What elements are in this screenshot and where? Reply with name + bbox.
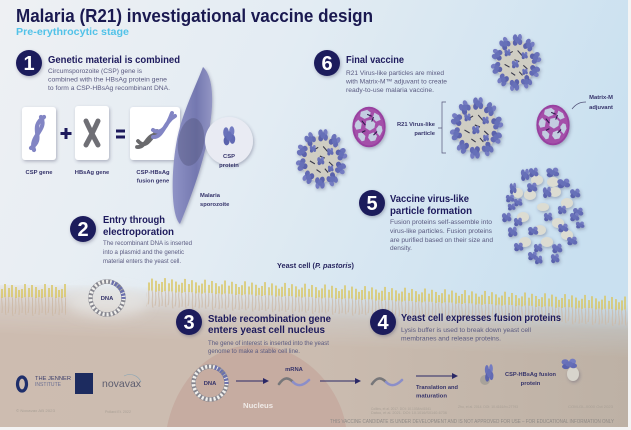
footer credits: Datoo, et al. 2021. DOI: 10.1016/S0140-6736 — [371, 411, 447, 415]
CSP protein callout: protein — [219, 163, 239, 169]
fusion protein label — [505, 372, 556, 387]
Matrix-M label with leader: adjuvant — [589, 105, 613, 111]
step 6 text: with Matrix-M™ adjuvant to create — [345, 78, 447, 86]
footer credits: © Novavax AB 2023 — [16, 409, 55, 413]
plasmid DNA entering cell — [90, 282, 124, 314]
soil: yeast cell interior — [0, 285, 628, 427]
subtitle: Pre-erythrocytic stage — [16, 26, 129, 38]
step 2 heading: Entry through — [103, 214, 165, 226]
step 5 heading — [390, 193, 472, 217]
Matrix-M label with leader: Matrix-M — [589, 95, 613, 101]
step 4 number: 4 — [377, 312, 389, 334]
arrow: translation and maturation: maturation — [416, 394, 447, 400]
card: fusion gene — [130, 107, 180, 184]
adjuvant: right — [537, 106, 569, 144]
step 2 number: 2 — [77, 219, 89, 241]
arrow: DNA to mRNA — [236, 378, 269, 384]
card: fusion gene: fusion gene — [137, 178, 170, 184]
logo: Jenner Institute: INSTITUTE — [35, 382, 61, 388]
step 1 heading: Genetic material is combined — [48, 54, 180, 66]
step 5 number: 5 — [366, 193, 378, 215]
malaria sporozoite: sporozoite — [200, 202, 230, 208]
title: Malaria (R21) investigational vaccine design — [16, 5, 373, 26]
step 6 text: R21 Virus-like particles are mixed — [346, 70, 444, 77]
plasmid DNA entering cell: DNA — [101, 296, 114, 302]
footer credits — [16, 405, 613, 415]
assembling virus-like particle — [502, 168, 584, 264]
step 2: electroporation — [70, 214, 192, 265]
fusion protein label: protein — [521, 381, 541, 387]
footer credits: Zhu, et al. 2014. DOI: 10.4161/hv.27793 — [458, 405, 518, 409]
step 6 number: 6 — [321, 53, 333, 75]
plasmid DNA in nucleus: DNA — [204, 381, 217, 387]
nucleus: Nucleus — [243, 401, 273, 410]
step 4 text: membranes and release proteins. — [401, 336, 501, 342]
yeast cell membrane — [0, 272, 628, 334]
plasmid DNA in nucleus — [194, 366, 227, 400]
step 4 number — [370, 309, 396, 335]
step 3 text: genome to make a stable cell line. — [208, 348, 300, 355]
step 6 heading: Final vaccine — [346, 54, 404, 66]
step 4 heading: Yeast cell expresses fusion proteins — [401, 312, 561, 324]
step 1: genetic material — [16, 50, 180, 184]
step 1 text — [48, 68, 170, 92]
step 3 heading: enters yeast cell nucleus — [208, 324, 325, 336]
step 6 text: ready-to-use malaria vaccine. — [346, 87, 434, 94]
card: fusion gene: CSP-HBsAg — [136, 170, 170, 176]
virus-like particle: top — [490, 33, 542, 92]
logo: Jenner Institute: THE JENNER — [35, 376, 71, 382]
step 1 text: to form a CSP-HBsAg recombinant DNA. — [48, 85, 170, 92]
step 5 text: virus-like particles. Fusion proteins — [390, 228, 493, 235]
malaria sporozoite: Malaria — [200, 193, 221, 199]
step 1 text: Circumsporozoite (CSP) gene is — [48, 68, 143, 75]
card: HBsAg gene — [75, 106, 110, 176]
step 2 text: into a plasmid and the genetic — [103, 249, 185, 256]
footer credits: COM-GL-0000 Oct 2023 — [568, 405, 613, 409]
step 3 number: 3 — [183, 312, 195, 334]
logo: Novavax: novavax — [102, 378, 142, 390]
step 1 number — [16, 50, 42, 76]
step 3 heading: Stable recombination gene — [208, 313, 331, 325]
mRNA — [279, 367, 309, 385]
protein fragment — [480, 364, 493, 385]
R21 particle label with bracket — [397, 102, 446, 153]
step 5 heading: Vaccine virus-like — [390, 193, 469, 205]
virus-like particle: centre — [449, 97, 504, 159]
step 5 text: Fusion proteins self-assemble into — [390, 219, 492, 226]
step 3 text: The gene of interest is inserted into the yeast — [208, 340, 329, 347]
step 3 heading — [208, 313, 331, 336]
equals sign — [116, 131, 125, 137]
R21 particle label with bracket: R21 Virus-like — [397, 122, 436, 128]
mRNA strand — [372, 378, 402, 385]
step 5: particle formation — [359, 190, 493, 252]
arrow: translation and maturation — [416, 373, 458, 400]
step 2 text: The recombinant DNA is inserted — [103, 240, 192, 247]
Matrix-M label with leader — [572, 95, 613, 111]
logo: University of Oxford — [75, 373, 93, 394]
step 5 text — [390, 219, 493, 252]
nucleus — [167, 345, 346, 427]
arrow: mRNA onward — [320, 378, 361, 384]
step 5 text: density. — [390, 245, 412, 252]
fusion protein — [562, 359, 579, 381]
R21 particle label with bracket: particle — [414, 131, 436, 137]
step 4: expression — [370, 309, 561, 342]
fusion protein label: CSP-HBsAg fusion — [505, 372, 556, 378]
step 2 heading: electroporation — [103, 226, 174, 238]
card: CSP gene: CSP gene — [26, 170, 53, 176]
step 2 text — [103, 240, 192, 265]
logo: Jenner Institute — [18, 376, 71, 391]
yeast cell label: Yeast cell (P. pastoris) — [277, 261, 354, 270]
virus-like particle: left — [295, 129, 348, 189]
step 3 text — [208, 340, 329, 355]
adjuvant: left — [353, 108, 385, 146]
card: CSP gene — [22, 107, 56, 176]
step 3: stable recombination — [176, 309, 331, 355]
step 6 text — [345, 70, 447, 94]
arrow: translation and maturation: Translation and — [416, 385, 458, 391]
step 1 text: combined with the HBsAg protein gene — [48, 76, 167, 84]
plus sign — [60, 128, 72, 139]
card: HBsAg gene: HBsAg gene — [75, 170, 110, 176]
malaria sporozoite — [173, 67, 230, 224]
step 3 number — [176, 309, 202, 335]
step 5 heading: particle formation — [390, 205, 472, 217]
step 6: final vaccine — [314, 50, 447, 94]
footer credits: Collins, et al. 2017. DOI: 10.1038/s41541 — [371, 407, 431, 411]
CSP protein callout: CSP — [223, 154, 235, 160]
step 5 text: are purified based on their size and — [390, 237, 493, 244]
mRNA: mRNA — [285, 367, 304, 373]
step 4 text — [401, 327, 532, 342]
step 4 text: Lysis buffer is used to break down yeast cell — [401, 327, 532, 334]
CSP protein callout — [205, 117, 253, 169]
footer credits: Pollard Et. 2022 — [105, 410, 131, 414]
step 1 number: 1 — [23, 53, 35, 75]
step 2 text: material enters the yeast cell. — [103, 258, 181, 265]
step 2 heading — [103, 214, 174, 238]
